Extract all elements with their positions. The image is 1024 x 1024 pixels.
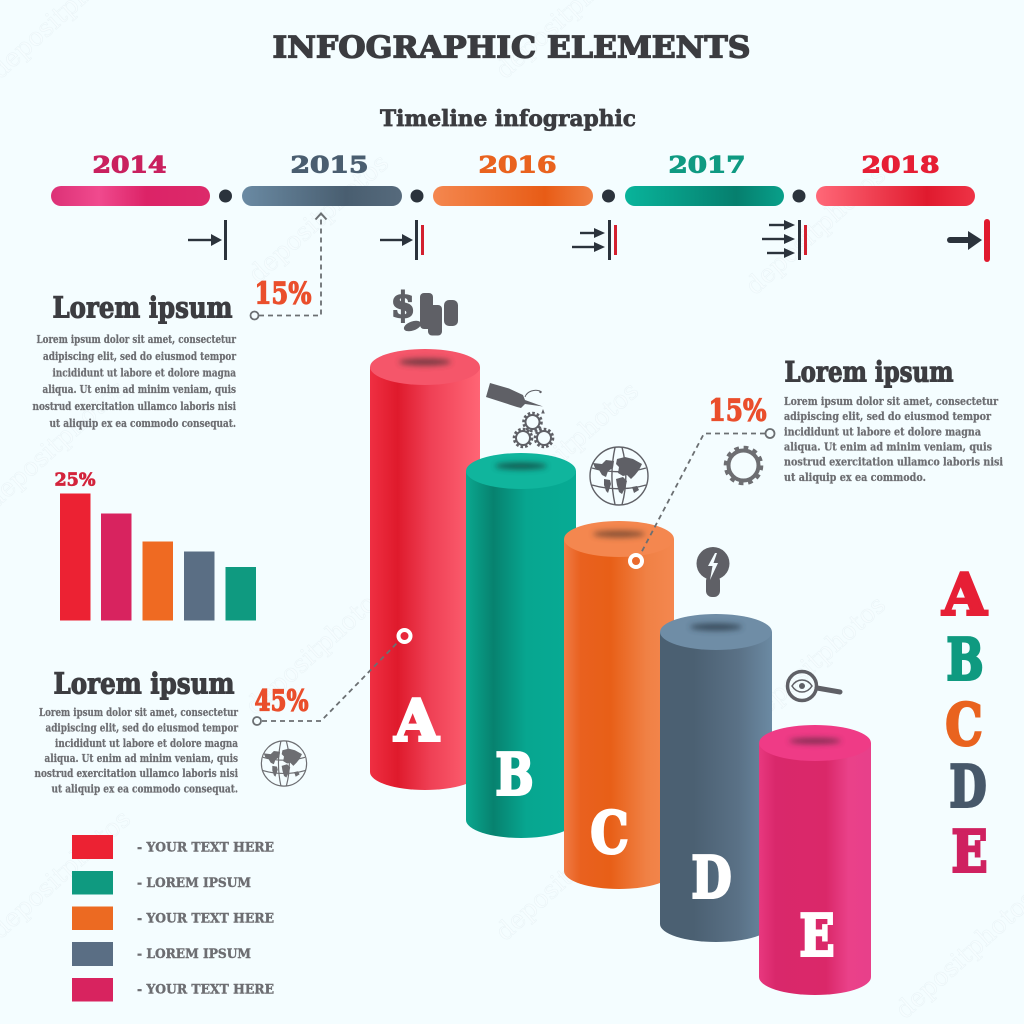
- cylinder anchor: [398, 630, 410, 642]
- year 2017: 2017: [668, 152, 746, 178]
- arrow marker 2: [380, 220, 424, 260]
- marker dot 3: [602, 190, 615, 202]
- callout: 15% to cylinder C: [630, 394, 774, 567]
- letter key: B: [946, 626, 984, 694]
- cylinder C: C: [590, 800, 628, 866]
- text: depositphotos: [740, 590, 891, 730]
- text block: right: [784, 356, 1003, 484]
- legend row 5: [72, 978, 274, 1002]
- marker dot 2: [410, 190, 424, 202]
- text block: left lower: [34, 666, 238, 796]
- letter key: A: [942, 562, 987, 628]
- paragraph: incididunt ut labore et dolore magna: [55, 737, 238, 750]
- legend row 5: - YOUR TEXT HERE: [137, 982, 274, 998]
- arrow marker 4: [762, 220, 807, 260]
- cylinder B: [466, 453, 576, 838]
- legend row 4: - LOREM IPSUM: [137, 947, 251, 962]
- year 2014: 2014: [92, 152, 166, 178]
- icon: light bulb: [696, 547, 730, 597]
- arrow marker 3: [572, 220, 617, 260]
- bar chart: [54, 470, 256, 620]
- letter key: D: [950, 754, 986, 820]
- icon: globe large: [590, 447, 648, 505]
- year 2018: 2018: [862, 152, 940, 178]
- legend row 4: [72, 942, 251, 966]
- text: depositphotos: [740, 160, 891, 300]
- marker dot 4: [792, 190, 806, 202]
- paragraph: incididunt ut labore et dolore magna: [52, 366, 236, 380]
- callout: 15% to timeline: [250, 214, 326, 320]
- paragraph: incididunt ut labore et dolore magna: [784, 426, 981, 438]
- icon: globe small: [261, 741, 307, 786]
- legend row 3: - YOUR TEXT HERE: [137, 912, 274, 926]
- oil can: [486, 383, 545, 414]
- text: depositphotos: [493, 376, 644, 516]
- dashed leader: [253, 642, 398, 725]
- text block: left upper: [32, 290, 236, 430]
- heading: Lorem ipsum: [52, 290, 233, 324]
- paragraph: [784, 395, 1003, 484]
- legend row 2: [72, 871, 251, 894]
- text: depositphotos: [243, 148, 394, 288]
- icon: oil can and gears: [486, 383, 553, 447]
- heading: Lorem ipsum: [54, 666, 235, 700]
- text: depositphotos: [490, 806, 641, 946]
- callout: 45% to cylinder A: [253, 630, 410, 725]
- cylinder D: [660, 614, 772, 942]
- paragraph: nostrud exercitation ullamco laboris nisi: [34, 767, 238, 780]
- legend row 1: [72, 835, 274, 859]
- letter key: [942, 562, 988, 886]
- year 2018: [816, 152, 975, 206]
- arrow marker 5: [947, 219, 990, 262]
- paragraph: aliqua. Ut enim ad minim veniam, quis: [784, 440, 992, 454]
- paragraph: [32, 333, 236, 430]
- paragraph: nostrud exercitation ullamco laboris nisi: [32, 400, 236, 413]
- letter key: E: [952, 818, 988, 886]
- letter key: C: [946, 692, 982, 758]
- cylinder B: B: [496, 742, 534, 808]
- paragraph: ut aliquip ex ea commodo consequat.: [50, 417, 236, 430]
- year 2015: 2015: [290, 152, 368, 178]
- dashed leader: [640, 429, 774, 555]
- year 2017: [625, 152, 784, 206]
- bar label 25%: 25%: [54, 470, 96, 490]
- subtitle: timeline infographic: Timeline infographic: [380, 106, 636, 132]
- year 2016: [433, 152, 593, 206]
- heading: Lorem ipsum: [784, 356, 954, 388]
- paragraph: adipiscing elit, sed do eiusmod tempor: [46, 722, 238, 734]
- paragraph: adipiscing elit, sed do eiusmod tempor: [784, 410, 991, 423]
- year 2016: 2016: [478, 152, 556, 178]
- percent label: 45%: [254, 684, 308, 718]
- paragraph: ut aliquip ex ea commodo.: [784, 471, 926, 484]
- paragraph: ut aliquip ex ea commodo consequat.: [52, 782, 238, 796]
- percent label: 15%: [708, 394, 766, 428]
- icon: eye magnifier: [788, 672, 840, 700]
- icon: dollar and coins: [391, 285, 458, 336]
- paragraph: aliqua. Ut enim ad minim veniam, quis: [44, 752, 238, 765]
- icon: gear: [726, 448, 762, 484]
- gears: [514, 413, 553, 447]
- cylinder A: A: [394, 688, 439, 754]
- year 2015: [242, 152, 402, 206]
- cylinder A: [370, 349, 480, 790]
- arrow marker 1: [188, 220, 227, 260]
- paragraph: adipiscing elit, sed do eiusmod tempor: [43, 350, 236, 363]
- legend row 2: - LOREM IPSUM: [137, 876, 251, 891]
- title: INFOGRAPHIC ELEMENTS: [272, 30, 750, 64]
- percent label: 15%: [254, 276, 312, 312]
- legend row 1: - YOUR TEXT HERE: [137, 840, 274, 856]
- legend: [72, 835, 274, 1002]
- legend row 3: [72, 906, 274, 930]
- cylinder anchor: [630, 555, 642, 567]
- dashed leader with arrow: [250, 214, 326, 320]
- timeline: [51, 152, 975, 206]
- cylinder D: D: [692, 844, 732, 912]
- cylinder E: [759, 725, 871, 995]
- cylinder C: [564, 521, 674, 889]
- icon: dollar and coins: $: [391, 285, 415, 326]
- text: depositphotos: [240, 580, 391, 720]
- paragraph: Lorem ipsum dolor sit amet, consectetur: [36, 333, 236, 346]
- paragraph: Lorem ipsum dolor sit amet, consectetur: [39, 706, 238, 719]
- marker dot 1: [219, 190, 232, 202]
- year 2014: [51, 152, 210, 206]
- paragraph: aliqua. Ut enim ad minim veniam, quis: [42, 383, 236, 396]
- cylinder E: E: [800, 902, 834, 970]
- paragraph: [34, 706, 238, 796]
